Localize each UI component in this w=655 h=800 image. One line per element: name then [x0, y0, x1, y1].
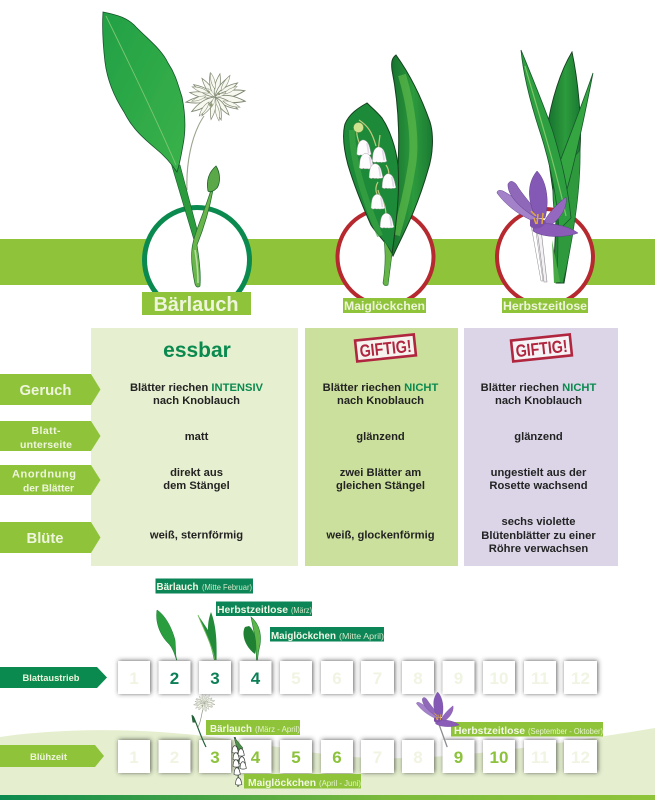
panel: Herbstzeitlose: [464, 328, 618, 566]
plant: Bärlauch: [103, 12, 246, 287]
month row: Blühzeit: [118, 740, 597, 773]
panel: Maiglöckchen: [305, 328, 458, 566]
text: Geruch Maiglöckchen: Blätter riechen NICHT: [323, 382, 438, 394]
text: Anordnung Herbstzeitlose: ungestielt aus der: [491, 467, 587, 479]
arrow: Blühzeit: [0, 745, 104, 767]
leaf: Maiglöckchen small: [243, 617, 261, 660]
month row: Blühzeit: 10: [490, 748, 508, 767]
text: Blüte Herbstzeitlose: sechs violette: [502, 516, 576, 528]
label: Maiglöckchen Mitte April: [270, 627, 384, 642]
text: Blüte Herbstzeitlose: Blütenblätter zu einer: [481, 530, 596, 542]
panel: Bärlauch: [91, 328, 298, 566]
arrow: Blattunterseite: [0, 421, 100, 451]
plant: Herbstzeitlose: [497, 50, 593, 283]
label: Bärlauch Mitte Februar: Bärlauch: [156, 582, 198, 593]
icon: Maiglöckchen sprig small: [232, 737, 246, 787]
text: Anordnung Bärlauch: direkt aus: [170, 467, 223, 479]
month row: Blattaustrieb: 1: [129, 669, 139, 688]
green band: [0, 239, 655, 285]
arrow: Blüte: [0, 522, 100, 553]
month row: Blühzeit: 8: [413, 748, 423, 767]
text: Geruch Bärlauch: nach Knoblauch: [153, 395, 240, 407]
circle: Bärlauch: [144, 208, 250, 312]
text: Blüte Herbstzeitlose: Röhre verwachsen: [489, 543, 588, 555]
icon: Bärlauch flower small: [192, 694, 215, 747]
label: Maiglöckchen: Maiglöckchen: [344, 299, 425, 313]
label: Maiglöckchen Mitte April: Maiglöckchen: [271, 631, 336, 642]
text: Geruch Maiglöckchen: [323, 382, 438, 407]
month row: Blattaustrieb: [118, 661, 597, 694]
month row: Blühzeit: 9: [454, 748, 463, 767]
label: Maiglöckchen April-Juni: Maiglöckchen: [248, 778, 316, 789]
month row: Blattaustrieb: 4: [251, 669, 261, 688]
month row: Blühzeit: 2: [170, 748, 179, 767]
circle: Maiglöckchen: [338, 209, 434, 305]
text: Blattunterseite Herbstzeitlose: glänzend: [514, 431, 563, 443]
label: Maiglöckchen Mitte April: (Mitte April): [339, 631, 384, 641]
text: Geruch Bärlauch: Blätter riechen INTENSIV: [130, 382, 264, 394]
label: Maiglöckchen April-Juni: (April - Juni): [319, 778, 361, 788]
arrow: Blattaustrieb: Blattaustrieb: [22, 673, 80, 684]
stamp: giftig: GIFTIG!: [359, 336, 412, 361]
label: Bärlauch März-April: [206, 720, 300, 735]
month row: Blühzeit: 1: [129, 748, 139, 767]
arrow: Anordnung der Blätter: [0, 465, 100, 495]
label: Bärlauch März-April: Bärlauch: [210, 724, 252, 735]
text: Blüte Herbstzeitlose: [481, 516, 596, 555]
label: Herbstzeitlose September-Oktober: Herbstzeitlose: [454, 726, 525, 737]
arrow: Blattunterseite: unterseite: [20, 439, 72, 451]
bottom bar: [0, 795, 655, 800]
text: Blattunterseite Maiglöckchen: glänzend: [356, 431, 405, 443]
label: Herbstzeitlose September-Oktober: (September - Oktober): [528, 726, 603, 736]
text: Anordnung Bärlauch: dem Stängel: [163, 480, 230, 492]
leaf: Bärlauch small: [157, 610, 177, 660]
arrow: Anordnung der Blätter: der Blätter: [23, 484, 74, 494]
text: Geruch Herbstzeitlose: Blätter riechen NICHT: [481, 382, 596, 394]
text: Anordnung Bärlauch: [163, 467, 230, 492]
month row: Blühzeit: 3: [210, 748, 220, 767]
label: Herbstzeitlose: Herbstzeitlose: [503, 299, 587, 313]
arrow: Blattunterseite: Blatt-: [32, 425, 61, 437]
label: Herbstzeitlose März: [216, 602, 312, 616]
month row: Blattaustrieb: 12: [571, 669, 590, 688]
month row: Blattaustrieb: 10: [490, 669, 508, 688]
label: Bärlauch Mitte Februar: [156, 578, 253, 594]
month row: Blattaustrieb: 11: [531, 669, 549, 688]
circle: Herbstzeitlose: [497, 209, 593, 305]
arrow: Blüte: Blüte: [26, 531, 64, 547]
text: Geruch Herbstzeitlose: nach Knoblauch: [495, 395, 582, 407]
month row: Blattaustrieb: 9: [454, 669, 463, 688]
arrow: Anordnung der Blätter: Anordnung: [12, 468, 76, 480]
arrow: Geruch: [0, 374, 100, 405]
text: Anordnung Maiglöckchen: gleichen Stängel: [336, 480, 425, 492]
leaf: Herbstzeitlose small: [198, 612, 217, 660]
label: Bärlauch März-April: (März - April): [255, 724, 300, 734]
label: Bärlauch: Bärlauch: [154, 294, 238, 316]
text: Geruch Bärlauch: [130, 382, 264, 407]
month row: Blühzeit: 6: [332, 748, 342, 767]
text: Blüte Maiglöckchen: weiß, glockenförmig: [325, 530, 435, 542]
text: Geruch Maiglöckchen: nach Knoblauch: [337, 395, 424, 407]
label: Maiglöckchen April-Juni: [244, 774, 361, 789]
arrow: Blattaustrieb: [0, 667, 107, 688]
text: Blüte Bärlauch: weiß, sternförmig: [149, 530, 243, 542]
text: Anordnung Herbstzeitlose: [489, 467, 588, 492]
month row: Blühzeit: 7: [373, 748, 382, 767]
text: Anordnung Maiglöckchen: zwei Blätter am: [340, 467, 421, 479]
plant: Maiglöckchen: [344, 55, 432, 286]
arrow: Geruch: Geruch: [20, 383, 72, 399]
text: Anordnung Maiglöckchen: [336, 467, 425, 492]
label: Herbstzeitlose September-Oktober: [451, 722, 603, 737]
month row: Blattaustrieb: 5: [291, 669, 301, 688]
background hill: [0, 728, 655, 796]
text: Blattunterseite Bärlauch: matt: [185, 431, 209, 443]
month row: Blattaustrieb: 6: [332, 669, 342, 688]
month row: Blattaustrieb: 8: [413, 669, 423, 688]
text: Anordnung Herbstzeitlose: Rosette wachsend: [489, 480, 588, 492]
stamp: giftig: GIFTIG!: [515, 336, 568, 361]
heading: essbar: essbar: [163, 339, 231, 362]
arrow: Blühzeit: Blühzeit: [30, 752, 68, 763]
month row: Blühzeit: 11: [531, 748, 549, 767]
month row: Blühzeit: 5: [291, 748, 301, 767]
month row: Blühzeit: 4: [251, 748, 261, 767]
month row: Blattaustrieb: 7: [373, 669, 382, 688]
month row: Blattaustrieb: 2: [170, 669, 179, 688]
month row: Blattaustrieb: 3: [210, 669, 220, 688]
month row: Blühzeit: 12: [571, 748, 590, 767]
label: Bärlauch Mitte Februar: (Mitte Februar): [202, 582, 252, 592]
text: Geruch Herbstzeitlose: [481, 382, 596, 407]
label: Herbstzeitlose März: Herbstzeitlose: [217, 605, 288, 616]
icon: Herbstzeitlose flower small: [416, 692, 459, 747]
label: Herbstzeitlose März: (März): [291, 605, 312, 615]
